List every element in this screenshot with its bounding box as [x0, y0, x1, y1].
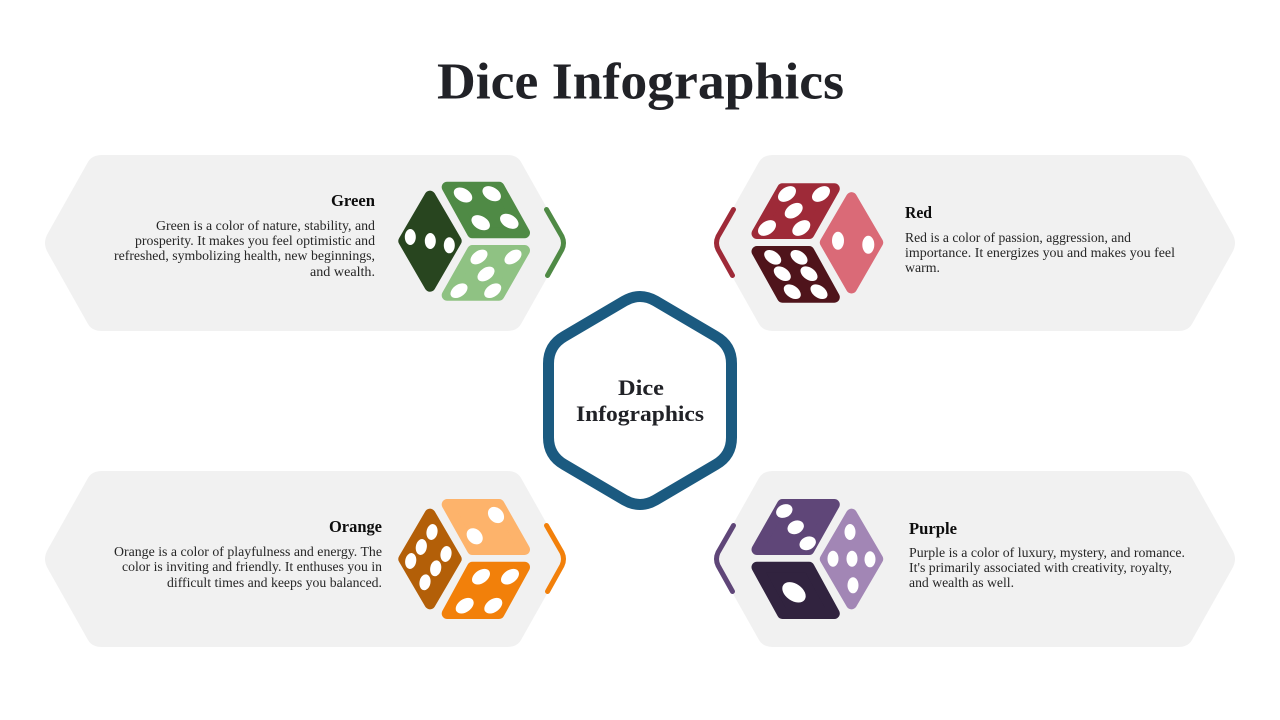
arrow: orange chevron [546, 526, 564, 592]
panel: orange [45, 471, 564, 647]
orange description: difficult times and keeps you balanced. [167, 575, 382, 590]
purple description: Purple is a color of luxury, mystery, and romance. [909, 545, 1185, 560]
red panel background [716, 155, 1235, 331]
orange panel background [45, 471, 564, 647]
red description [905, 230, 1175, 275]
red heading: Red [905, 203, 932, 222]
center label [576, 375, 704, 426]
arrow: purple chevron [716, 526, 734, 592]
purple panel background [716, 471, 1235, 647]
arrow: red chevron [716, 210, 734, 276]
green description: Green is a color of nature, stability, and [156, 218, 375, 233]
orange description: color is inviting and friendly. It enthuses you in [122, 559, 382, 574]
icon: red dice [755, 183, 878, 302]
title: Dice Infographics [437, 54, 844, 110]
hexagon outline [548, 296, 732, 504]
green description: refreshed, symbolizing health, new beginnings, [114, 248, 375, 263]
center hexagon [548, 296, 732, 504]
orange description [114, 544, 382, 590]
purple description [909, 545, 1185, 590]
center label: Infographics [576, 401, 704, 426]
center label: Dice [618, 375, 664, 400]
icon: orange dice [404, 504, 524, 617]
orange heading: Orange [329, 517, 382, 536]
red description: Red is a color of passion, aggression, and [905, 230, 1131, 245]
green panel background [45, 155, 564, 331]
green description [114, 218, 375, 279]
panel: red [716, 155, 1235, 331]
red description: warm. [905, 260, 940, 275]
green description: prosperity. It makes you feel optimistic and [135, 233, 375, 248]
arrow: green chevron [546, 210, 564, 276]
panel: purple [716, 471, 1235, 647]
purple description: It's primarily associated with creativity, royalty, [909, 560, 1172, 575]
green heading: Green [331, 191, 375, 210]
purple heading: Purple [909, 519, 957, 538]
icon: purple dice [757, 502, 878, 614]
panel: green [45, 155, 564, 331]
orange description: Orange is a color of playfulness and energy. The [114, 544, 382, 559]
icon: green dice [404, 183, 524, 301]
green description: and wealth. [310, 264, 375, 279]
red description: importance. It energizes you and makes you feel [905, 245, 1175, 260]
purple description: and wealth as well. [909, 575, 1014, 590]
